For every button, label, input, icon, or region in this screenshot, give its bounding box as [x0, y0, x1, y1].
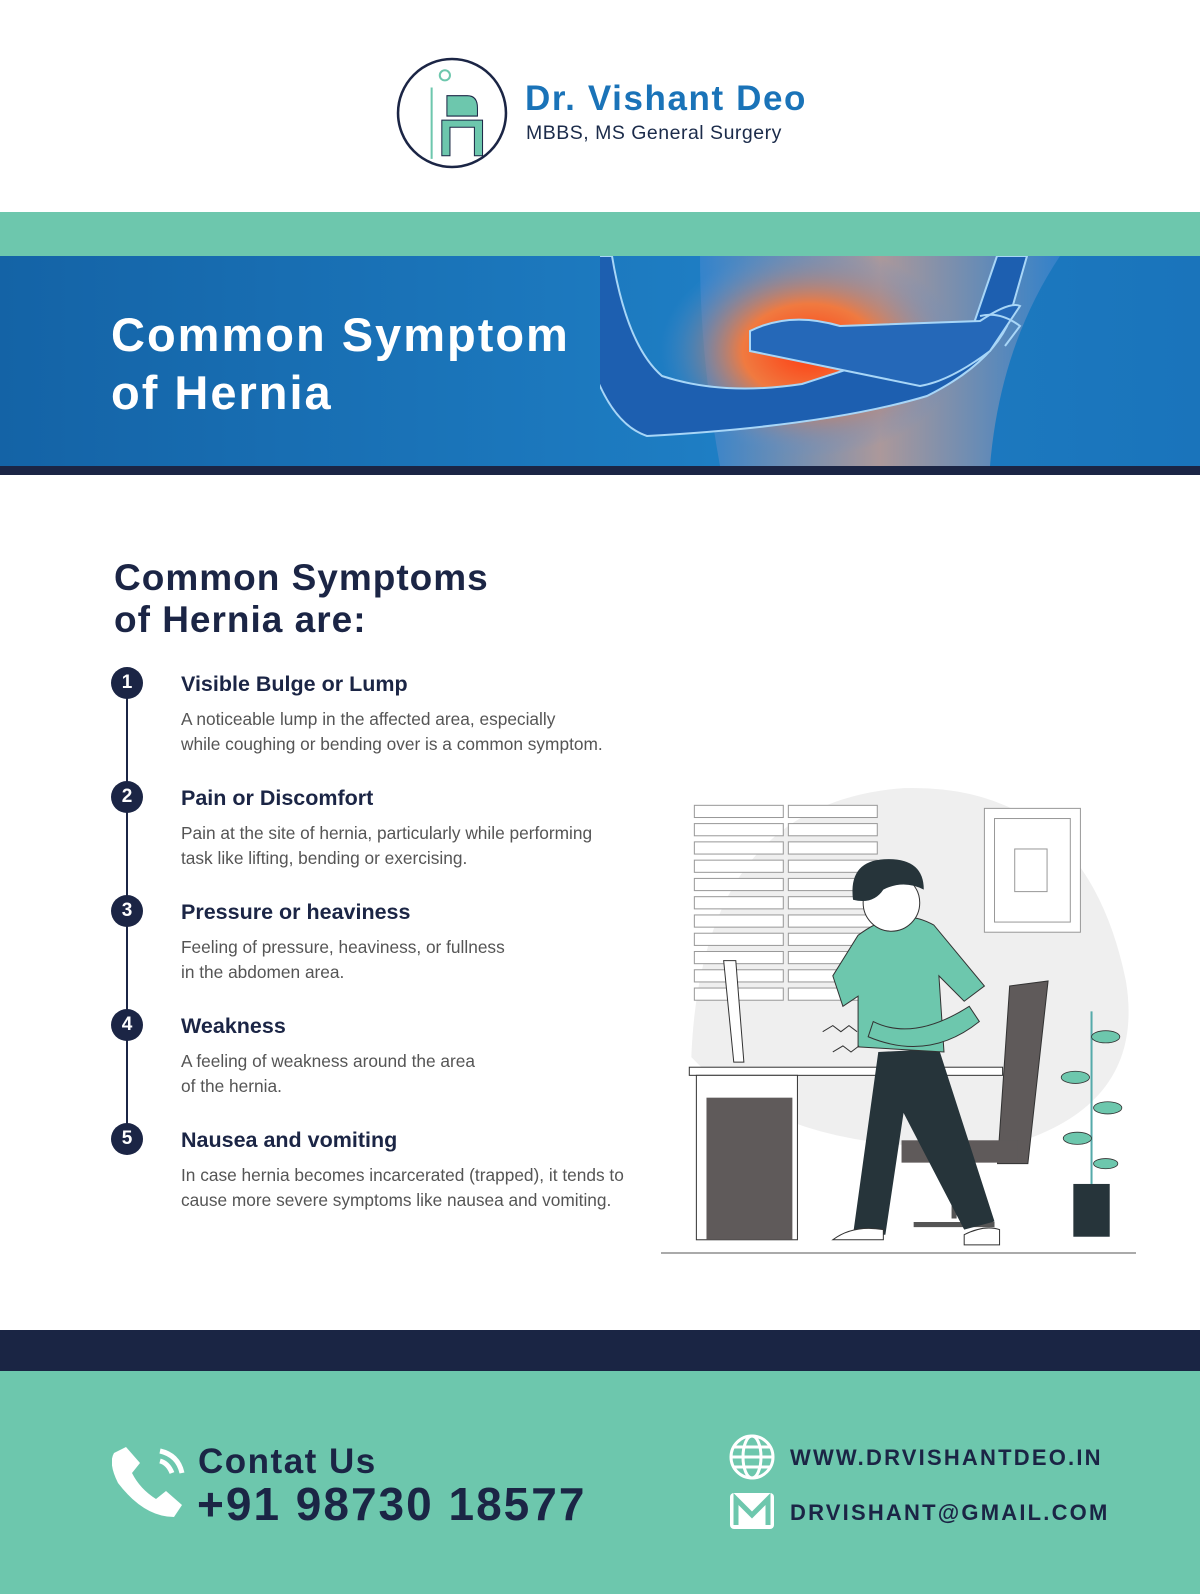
- icon: globe: [730, 1434, 774, 1480]
- timeline: 2: [122, 786, 132, 807]
- banner title: of Hernia: [111, 366, 333, 419]
- section heading: [114, 557, 489, 640]
- phone number: +91 98730 18577: [197, 1478, 586, 1530]
- icon: mail: [730, 1493, 774, 1529]
- symptom 4: [111, 1009, 475, 1096]
- illustration: man in pain at desk: [661, 788, 1136, 1254]
- dark strip: [0, 466, 1200, 475]
- section heading: of Hernia are:: [114, 599, 367, 640]
- email: DRVISHANT@GMAIL.COM: [790, 1500, 1110, 1525]
- timeline: Nausea and vomiting: [181, 1128, 397, 1152]
- doctor name: Dr. Vishant Deo: [525, 79, 807, 118]
- timeline: task like lifting, bending or exercising.: [181, 848, 467, 868]
- timeline: [111, 667, 624, 1210]
- footer: [0, 1371, 1200, 1594]
- timeline: 1: [122, 672, 132, 693]
- timeline: Weakness: [181, 1014, 286, 1038]
- doctor qualification: MBBS, MS General Surgery: [526, 122, 782, 144]
- symptom 1: [111, 667, 603, 754]
- banner title: Common Symptom: [111, 308, 570, 361]
- banner title: [111, 308, 570, 419]
- banner image: abdomen: [600, 256, 1060, 466]
- timeline: while coughing or bending over is a common symptom.: [181, 734, 603, 754]
- timeline: A noticeable lump in the affected area, especially: [181, 709, 555, 729]
- timeline: Feeling of pressure, heaviness, or fullness: [181, 937, 505, 957]
- timeline: In case hernia becomes incarcerated (trapped), it tends to: [181, 1165, 624, 1185]
- timeline: 5: [122, 1128, 132, 1149]
- timeline: cause more severe symptoms like nausea and vomiting.: [181, 1190, 611, 1210]
- symptom 5: [111, 1123, 624, 1210]
- section heading: Common Symptoms: [114, 557, 489, 598]
- timeline: A feeling of weakness around the area: [181, 1051, 475, 1071]
- timeline: 3: [122, 900, 132, 921]
- timeline: of the hernia.: [181, 1076, 282, 1096]
- timeline: Visible Bulge or Lump: [181, 672, 408, 696]
- contact label: Contat Us: [198, 1442, 377, 1481]
- timeline: Pain at the site of hernia, particularly while performing: [181, 823, 592, 843]
- footer dark band: [0, 1330, 1200, 1371]
- timeline: Pain or Discomfort: [181, 786, 373, 810]
- website: WWW.DRVISHANTDEO.IN: [790, 1445, 1103, 1470]
- timeline: Pressure or heaviness: [181, 900, 410, 924]
- banner: [0, 256, 1200, 466]
- timeline: in the abdomen area.: [181, 962, 344, 982]
- timeline: 4: [122, 1014, 132, 1035]
- teal band: [0, 212, 1200, 256]
- logo: [396, 58, 508, 168]
- icon: phone: [112, 1447, 184, 1517]
- symptom 3: [111, 895, 505, 982]
- symptom 2: [111, 781, 592, 868]
